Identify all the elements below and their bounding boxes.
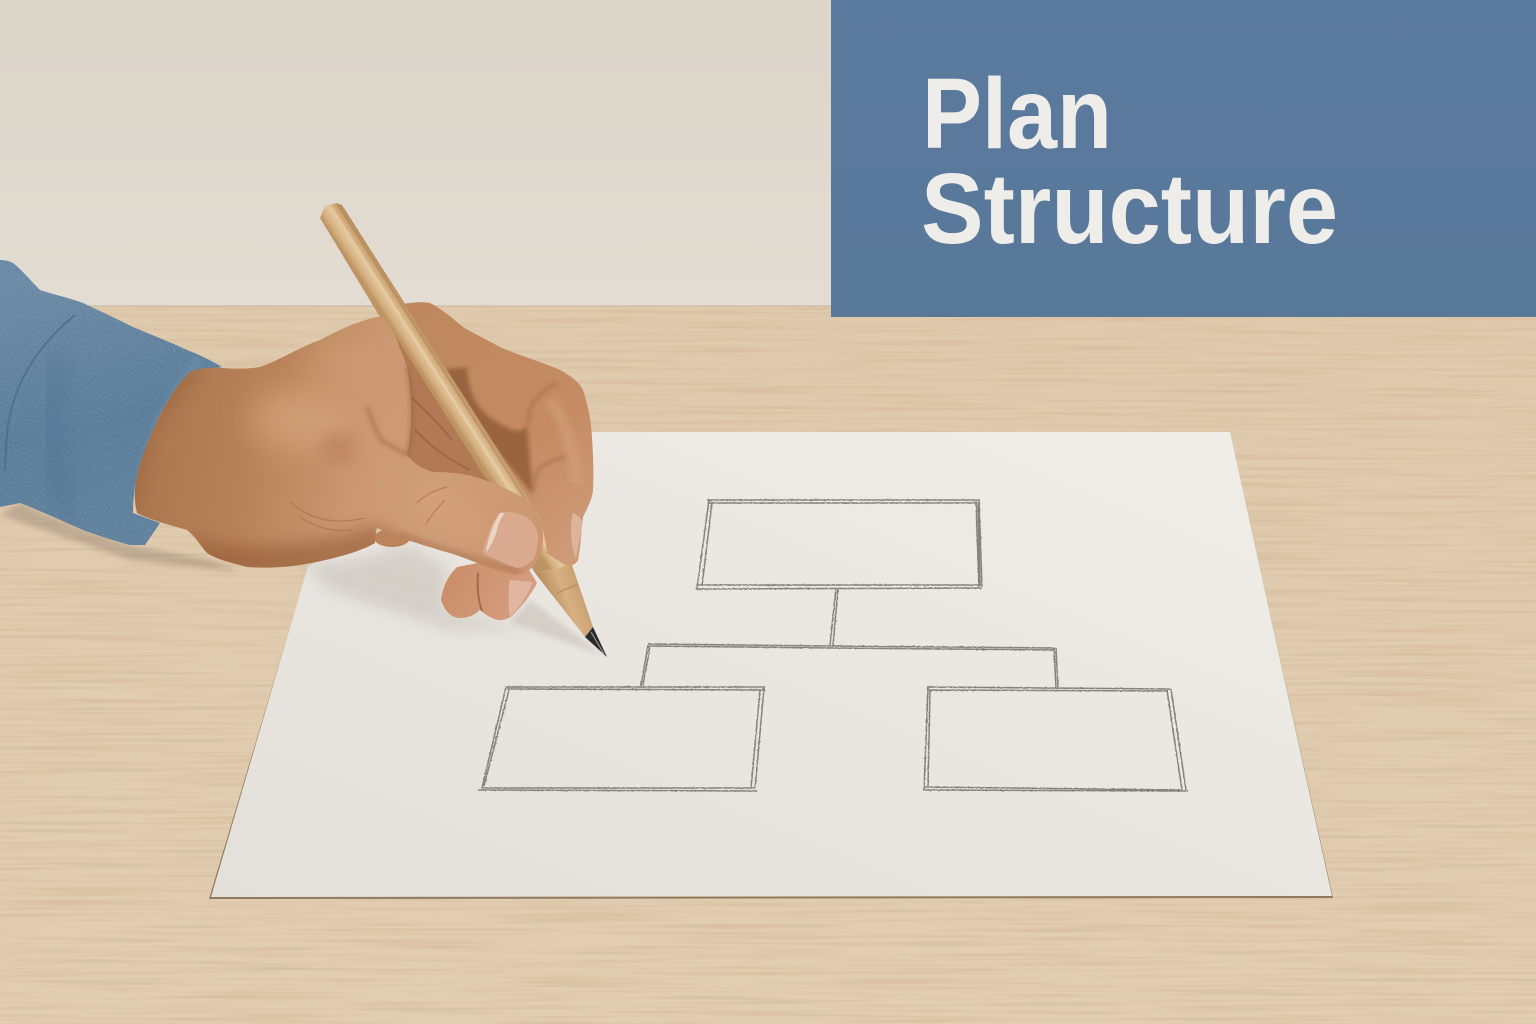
wrist shadow <box>135 372 191 488</box>
title panel <box>831 0 1536 317</box>
pencil <box>320 203 607 657</box>
index and middle fingers behind the pencil <box>383 302 593 565</box>
shadow under hand and pencil <box>0 503 604 656</box>
thumb light <box>415 480 495 541</box>
sheet of paper <box>209 432 1333 899</box>
palm shadow <box>196 520 402 568</box>
pencil tip <box>585 627 607 657</box>
thumb creases <box>290 487 447 530</box>
left box <box>478 687 765 791</box>
fingertip over the pencil <box>534 478 593 565</box>
fingernail <box>571 513 582 558</box>
finger highlight <box>550 400 576 500</box>
thumb lower shadow <box>400 535 520 572</box>
title text: Structure <box>921 153 1338 265</box>
lower fingers <box>374 529 537 620</box>
title text: Plan <box>922 58 1112 170</box>
palm fold <box>374 529 410 547</box>
wooden desk <box>0 305 1536 1024</box>
finger crease <box>528 383 567 490</box>
cuff seam <box>5 315 75 470</box>
finger shadow <box>440 367 533 495</box>
top box <box>696 500 982 589</box>
fold between thumb and index <box>395 335 490 482</box>
web crease <box>367 367 412 455</box>
knuckle highlight <box>250 390 350 450</box>
sleeve <box>0 260 222 545</box>
background wall <box>0 0 1536 306</box>
connectors <box>641 588 1058 688</box>
thumbnail <box>483 512 538 568</box>
title text <box>921 58 1338 265</box>
knuckle redness <box>323 435 353 460</box>
pencil sketch: org chart <box>478 500 1188 791</box>
right box <box>923 687 1188 791</box>
back of hand and thumb <box>134 316 543 575</box>
